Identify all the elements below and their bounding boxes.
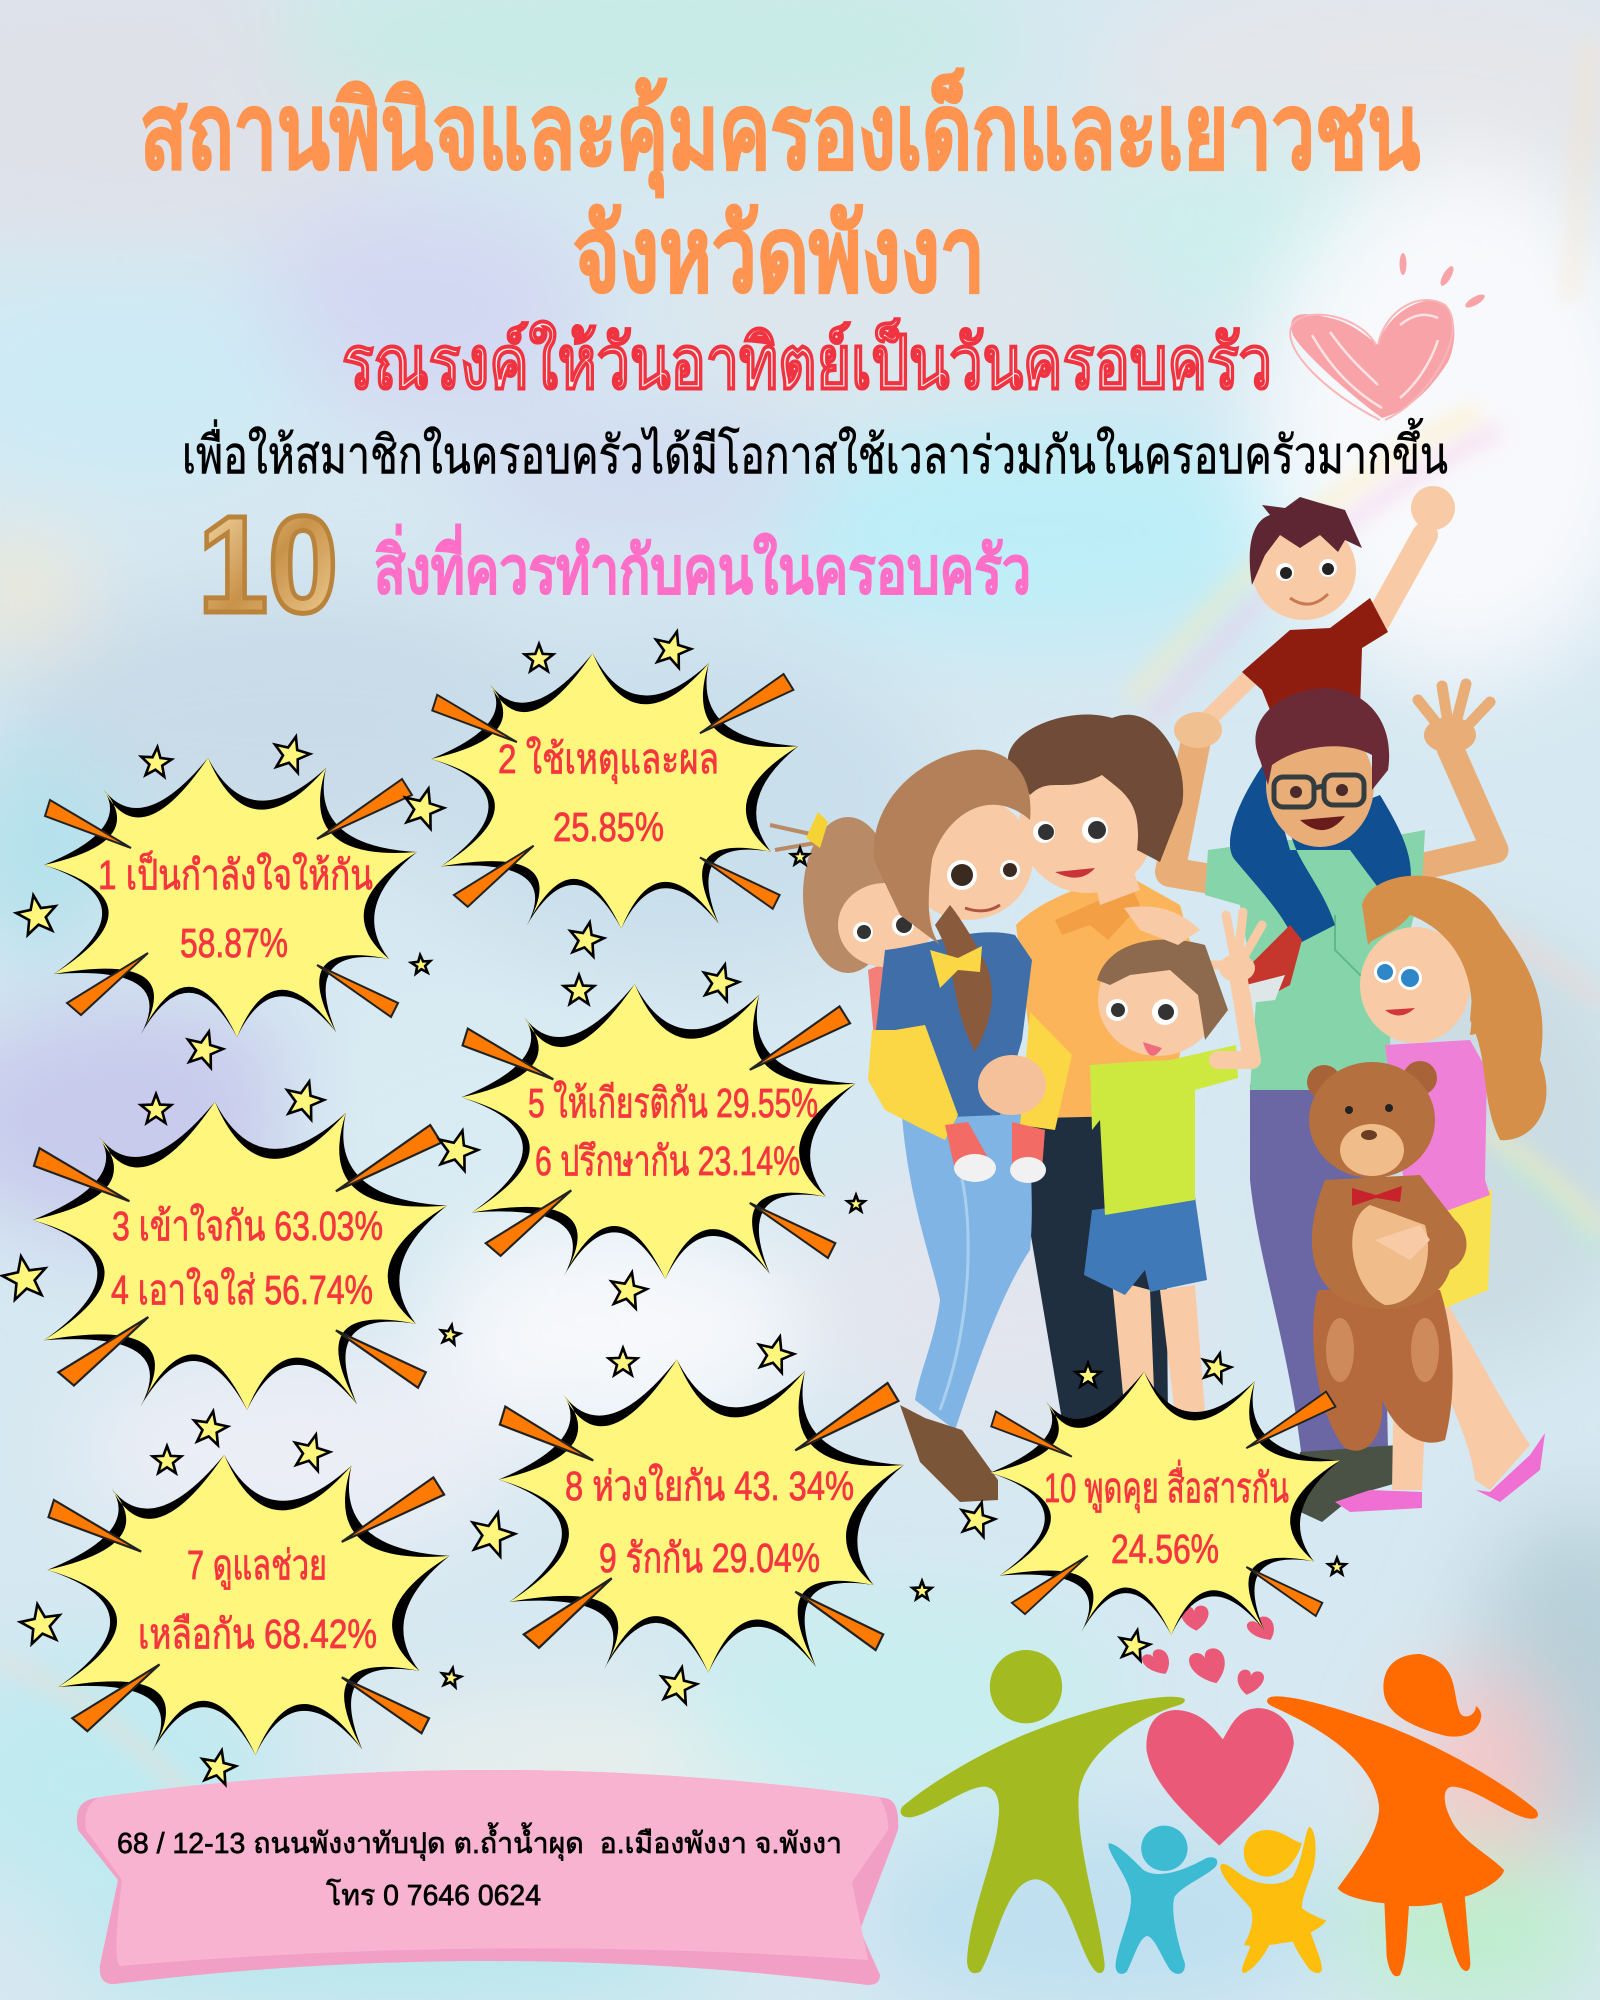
boy on shoulders [1205, 486, 1455, 722]
icon: scribble heart [1290, 253, 1487, 420]
phone number: โทร 0 7646 0624 [326, 1878, 541, 1912]
burst 2: reason [431, 653, 798, 928]
burst 3: understanding and attention: 4 เอาใจใส่ 56.74% [111, 1267, 373, 1313]
burst 6: care and love [499, 1359, 904, 1673]
logo: father figure [901, 1650, 1185, 1973]
title line 2: จังหวัดพังงา [573, 196, 985, 314]
girl with pink shirt [1335, 876, 1546, 1512]
family illustration [770, 486, 1546, 1522]
burst 3: understanding and attention: 3 เข้าใจกัน 63.03% [112, 1203, 383, 1249]
icon: gold number 10: 10 [198, 488, 338, 642]
burst 1: encouragement: 58.87% [180, 920, 288, 966]
burst 4: respect and consultation [461, 984, 855, 1279]
father with glasses [1170, 684, 1495, 1522]
subtitle: campaign: รณรงค์ให้วันอาทิตย์เป็นวันครอบครัว [342, 319, 1272, 404]
burst 2: reason: 2 ใช้เหตุและผล [498, 736, 719, 784]
logo: boy figure [1109, 1826, 1217, 1974]
father in orange shirt [1008, 714, 1195, 1420]
burst 5: helping each other: เหลือกัน 68.42% [138, 1611, 377, 1657]
burst 2: reason: 25.85% [553, 804, 664, 850]
logo: small hearts [1139, 1605, 1282, 1697]
son in green shirt [1084, 906, 1262, 1415]
burst 5: helping each other [47, 1455, 450, 1755]
burst 1: encouragement: 1 เป็นกำลังใจให้กัน [98, 851, 373, 898]
decorative stars [0, 627, 1346, 1786]
burst 6: care and love: 9 รักกัน 29.04% [599, 1535, 820, 1581]
burst 7: talking: 24.56% [1111, 1526, 1219, 1572]
burst 6: care and love: 8 ห่วงใยกัน 43. 34% [565, 1463, 854, 1509]
teddy bear [1307, 1061, 1466, 1451]
logo: big heart [1146, 1708, 1294, 1846]
mother holding toddler [770, 750, 1072, 1502]
burst 7: talking: 10 พูดคุย สื่อสารกัน [1044, 1460, 1289, 1513]
address banner [77, 1770, 898, 1985]
heading: ten things to do: สิ่งที่ควรทำกับคนในครอบครัว [374, 523, 1031, 607]
burst 4: respect and consultation: 6 ปรึกษากัน 23.14% [535, 1138, 800, 1184]
burst 5: helping each other: 7 ดูแลช่วย [187, 1542, 327, 1590]
address text: 68 / 12-13 ถนนพังงาทับปุด ต.ถ้ำน้ำผุด อ.เมืองพังงา จ.พังงา [117, 1822, 842, 1861]
burst 1: encouragement [44, 758, 417, 1037]
family logo: parents, children and hearts [901, 1605, 1538, 1976]
burst 7: talking [990, 1372, 1340, 1635]
burst 4: respect and consultation: 5 ให้เกียรติกัน 29.55% [528, 1080, 818, 1126]
logo: mother figure [1267, 1654, 1538, 1976]
logo: girl figure [1220, 1827, 1326, 1973]
burst 3: understanding and attention [33, 1102, 447, 1410]
